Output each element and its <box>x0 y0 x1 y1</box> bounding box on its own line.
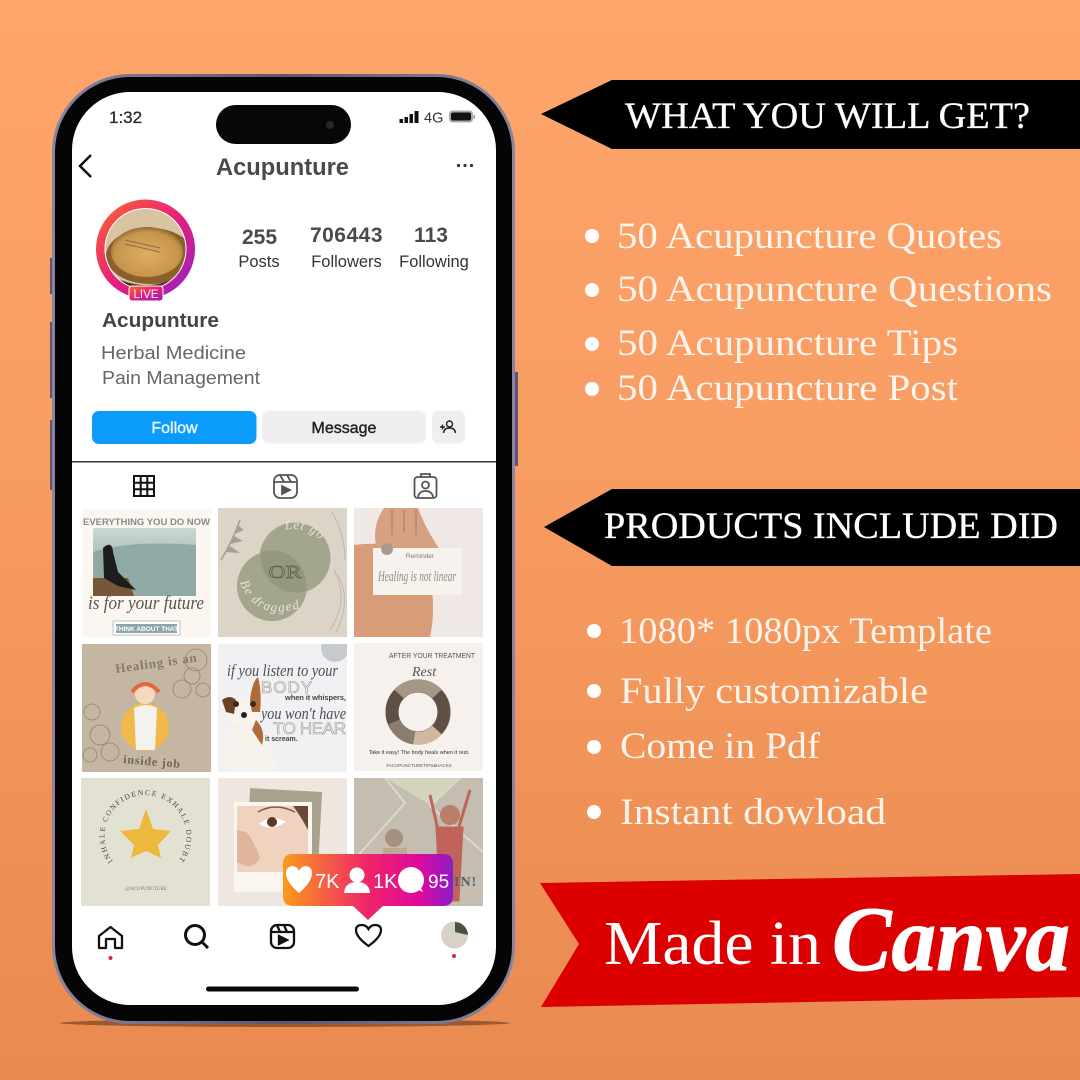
list: products include: Instant dowload <box>620 792 887 833</box>
post: healing is an inside job: inside job <box>123 752 181 771</box>
list: what you will get: 50 Acupuncture Quotes <box>617 216 1002 257</box>
bio <box>101 309 260 388</box>
post: everything you do now: THINK ABOUT THAT <box>115 626 178 633</box>
list: what you will get <box>585 216 1052 409</box>
icon: add person <box>440 421 456 433</box>
icon: comment <box>398 867 424 893</box>
post: let go or be dragged <box>218 508 347 637</box>
live badge: LIVE <box>134 289 159 301</box>
home indicator <box>206 986 359 992</box>
banner: what you will get <box>541 80 1080 149</box>
stats: 255 <box>242 226 277 249</box>
banner: what you will get: WHAT YOU WILL GET? <box>625 96 1030 137</box>
icon: reels tab <box>274 475 297 498</box>
notification dots <box>108 954 456 960</box>
phone shadow <box>60 1019 510 1027</box>
list: what you will get: 50 Acupuncture Tips <box>617 323 958 364</box>
header <box>80 154 473 181</box>
tooltip <box>283 854 453 920</box>
tooltip: 1K <box>373 871 398 893</box>
buttons <box>92 410 465 444</box>
icon: home <box>99 927 122 948</box>
icon: reels <box>271 925 294 948</box>
list: products include <box>587 611 992 833</box>
stats: 706443 <box>310 224 383 247</box>
more dots <box>457 164 473 167</box>
banner: made in canva <box>540 874 1080 1007</box>
post: let go or be dragged: Let go <box>285 521 323 538</box>
header: Acupunture <box>216 154 349 181</box>
banner: products include: PRODUCTS INCLUDE DID <box>604 506 1058 547</box>
post: after your treatment: AFTER YOUR TREATMENT <box>389 653 476 660</box>
phone body <box>52 74 515 1024</box>
side buttons <box>50 258 518 490</box>
icon: person <box>344 868 370 893</box>
back arrow <box>80 155 91 177</box>
tab icons <box>134 474 436 498</box>
post: healing is an inside job <box>82 644 211 772</box>
battery <box>449 110 475 122</box>
list: products include: Fully customizable <box>620 671 928 712</box>
list: what you will get: 50 Acupuncture Post <box>617 368 959 409</box>
phone <box>50 74 518 1027</box>
stats: 113 <box>414 224 448 247</box>
post: healing is an inside job: Healing is an <box>114 650 198 676</box>
dynamic island <box>216 105 351 144</box>
banner: products include <box>544 489 1080 566</box>
post: if you listen to your body: it scream. <box>265 736 298 743</box>
post: everything you do now <box>82 509 211 637</box>
post: healing is not linear: Healing is not linear <box>377 569 456 585</box>
stats: Followers <box>311 253 382 271</box>
post: if you listen to your body: if you listen to your <box>227 661 338 680</box>
bio: Pain Management <box>102 368 260 388</box>
post: if you listen to your body <box>218 634 349 772</box>
post: if you listen to your body: when it whispers, <box>284 693 346 702</box>
tabs divider <box>72 461 496 462</box>
bio: Acupunture <box>102 309 219 332</box>
list: products include: 1080* 1080px Template <box>619 611 992 652</box>
icon: heart <box>286 866 312 893</box>
bio: Herbal Medicine <box>101 343 246 363</box>
tooltip: 7K <box>315 871 340 893</box>
post: polaroid eye <box>218 778 347 906</box>
profile avatar <box>441 922 468 948</box>
post: inhale confidence exhale doubt: INHALE CONFIDENCE EXHALE DOUBT <box>100 790 192 864</box>
status bar: 4G <box>424 110 443 126</box>
post: woman stretching <box>354 778 483 906</box>
bottom navigation <box>99 922 468 960</box>
post: inhale confidence exhale doubt <box>81 778 210 906</box>
icon: heart nav <box>356 925 381 946</box>
post: woman stretching: IN! <box>454 875 477 890</box>
post: if you listen to your body: BODY <box>261 678 313 697</box>
post: after your treatment: Take it easy! The body heals when it rest. <box>369 750 470 756</box>
post: if you listen to your body: you won't have <box>259 704 346 723</box>
post: let go or be dragged: Be dragged <box>240 580 299 614</box>
list: products include: Come in Pdf <box>620 726 821 767</box>
post grid <box>81 508 483 906</box>
avatar <box>96 200 195 301</box>
post: everything you do now: EVERYTHING YOU DO NOW <box>83 517 210 528</box>
post: if you listen to your body: TO HEAR <box>273 719 346 738</box>
post: healing is not linear: Reminder <box>406 553 435 560</box>
buttons: Follow <box>151 420 198 437</box>
list: what you will get: 50 Acupuncture Questions <box>617 269 1052 310</box>
post: after your treatment: #ACUPUNCTURETIPS&HACKS <box>386 763 452 768</box>
post: healing is not linear <box>354 508 483 637</box>
post: let go or be dragged: OR <box>268 562 302 582</box>
tooltip: 95 <box>428 872 449 893</box>
icon: grid <box>134 476 154 496</box>
icon: tagged tab <box>414 474 436 498</box>
screen <box>72 92 496 1005</box>
banner: made in canva: Canva <box>832 888 1070 990</box>
stats: Posts <box>238 253 280 271</box>
buttons: Message <box>312 420 377 437</box>
signal <box>400 111 418 123</box>
banner: made in canva: Made in <box>604 910 821 978</box>
post: after your treatment <box>354 643 483 771</box>
status bar <box>109 105 475 144</box>
status bar: 1:32 <box>109 108 142 127</box>
post: after your treatment: Rest <box>411 665 437 680</box>
post: inhale confidence exhale doubt: @ACUPUNCTURE <box>125 887 167 892</box>
stats <box>238 224 469 271</box>
stats: Following <box>399 253 469 271</box>
icon: search <box>186 926 208 948</box>
post: everything you do now: is for your future <box>88 593 204 614</box>
